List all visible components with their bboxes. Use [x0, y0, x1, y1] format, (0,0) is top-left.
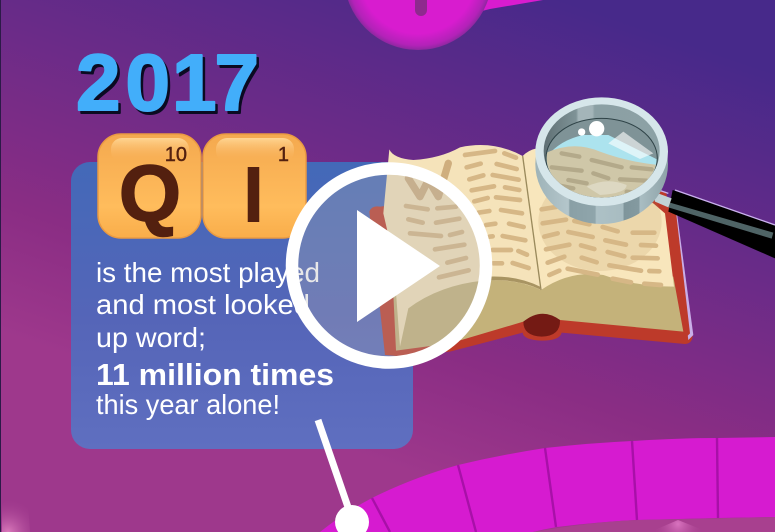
open book	[369, 145, 693, 356]
corner glow	[2, 510, 30, 532]
bottom timeline band	[320, 437, 775, 532]
lens glass	[545, 118, 658, 200]
page text lines	[406, 151, 661, 285]
spine tab	[523, 314, 560, 337]
description text: this year alone!	[96, 389, 280, 420]
description text: 11 million times	[96, 357, 334, 392]
page decoration letter	[408, 163, 448, 197]
magnifier shadow	[538, 198, 662, 271]
magnifying glass	[535, 97, 775, 258]
tile: I: 1	[278, 144, 289, 166]
timeline pin	[318, 420, 369, 532]
handle	[653, 189, 775, 258]
tile: Q: Q	[119, 149, 181, 238]
lens rim	[535, 97, 668, 206]
description text: is the most played	[96, 257, 320, 288]
left edge strip	[0, 0, 1, 532]
text panel	[71, 162, 413, 449]
book page block	[394, 274, 684, 351]
description text: up word;	[96, 322, 206, 353]
tile: Q: 10	[165, 144, 187, 166]
tile: I	[203, 134, 306, 239]
lens highlights	[578, 121, 604, 136]
year heading	[78, 53, 259, 115]
spine crease	[523, 156, 541, 290]
lens interior	[544, 104, 660, 198]
lens body	[535, 157, 668, 224]
tile: Q	[98, 134, 201, 238]
play button	[292, 168, 486, 362]
description text: and most looked	[96, 289, 310, 320]
book cover	[369, 190, 693, 356]
description text	[96, 257, 334, 420]
year heading: 2017	[78, 41, 262, 130]
right page	[523, 148, 674, 290]
top timeline node	[344, 0, 543, 50]
year heading: 2017	[76, 38, 259, 127]
tile: I: I	[242, 150, 265, 239]
left page	[383, 145, 541, 347]
